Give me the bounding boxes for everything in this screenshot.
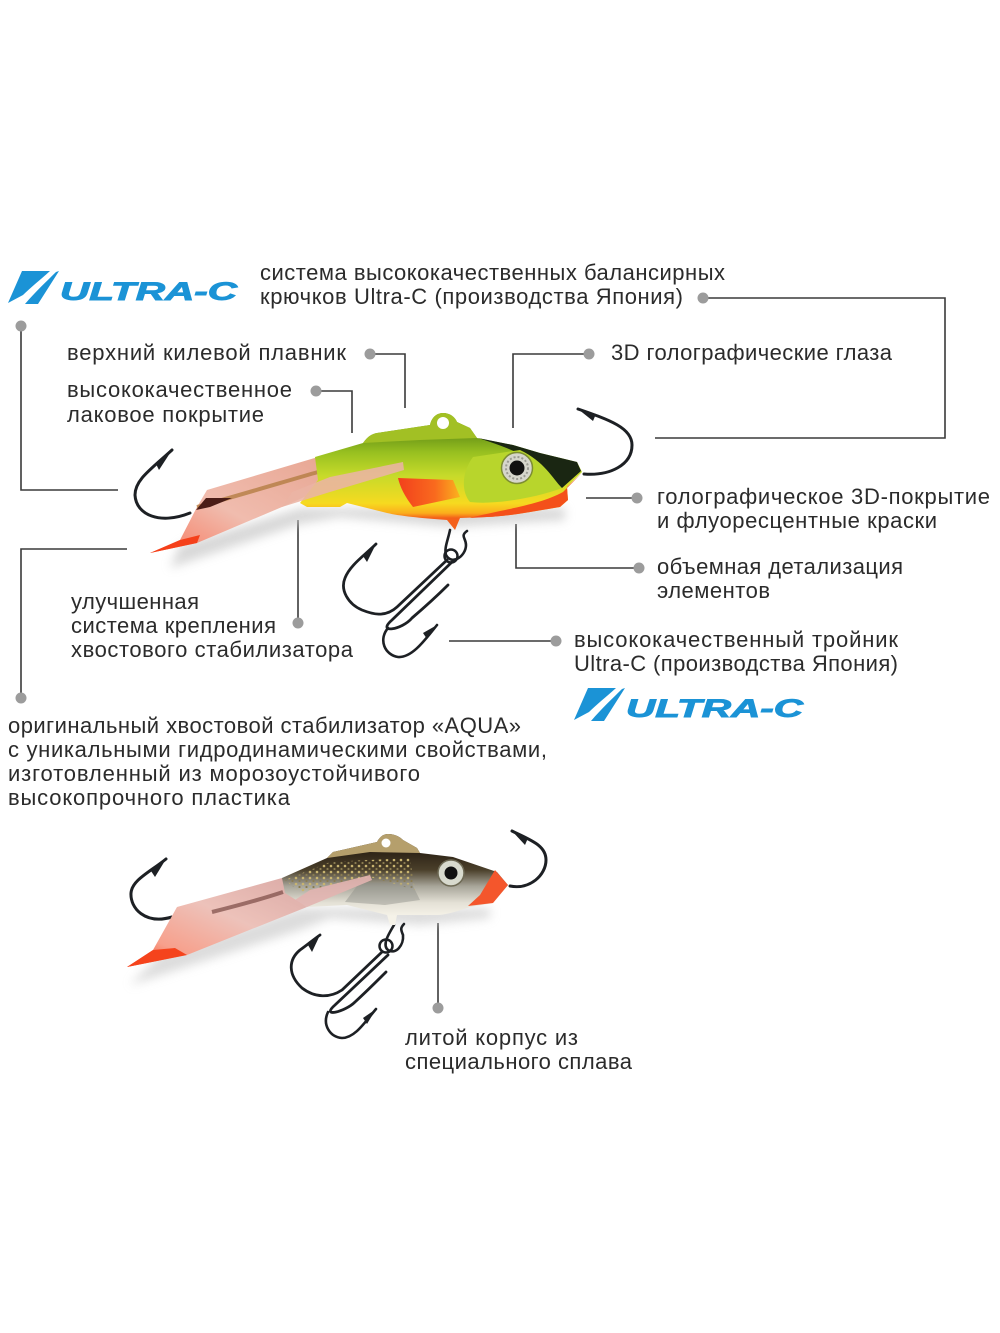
text: cast body: специального сплава [405, 1049, 633, 1074]
dark head top [478, 438, 581, 488]
scale band [285, 858, 415, 892]
text: hooks description: крючков Ultra-C (производства Япония) [260, 284, 683, 309]
gill cover [464, 450, 562, 503]
text: holographic coating: голографическое 3D-покрытие [657, 484, 990, 509]
text: AQUA stabilizer: изготовленный из морозоустойчивого [8, 761, 420, 786]
body [300, 413, 582, 530]
text: AQUA stabilizer: оригинальный хвостовой стабилизатор «AQUA» [8, 713, 521, 738]
callout leader lines [16, 292, 945, 1014]
logo: Ultra-C bottom [574, 688, 805, 723]
shadow [170, 508, 565, 568]
text: stabilizer mount: улучшенная [71, 589, 199, 614]
text: detail: элементов [657, 578, 770, 603]
text: upper keel fin: верхний килевой плавник [67, 340, 346, 365]
eye [438, 860, 464, 886]
text: treble hook: высококачественный тройник [574, 627, 898, 652]
red chin [468, 870, 508, 906]
body [282, 834, 508, 925]
logo: Ultra-C top: ULTRA-C [60, 278, 239, 306]
dorsal fin [327, 834, 420, 858]
shadow [130, 908, 490, 985]
text: 3D eyes: 3D голографические глаза [611, 340, 893, 365]
text: lacquer coating: лаковое покрытие [67, 402, 264, 427]
tail stabilizer [127, 878, 320, 967]
tail stabilizer [150, 457, 320, 553]
text: treble hook: Ultra-C (производства Япония) [574, 651, 898, 676]
lure: silver fish [127, 831, 546, 1038]
eye [502, 452, 532, 484]
text: lacquer coating: высококачественное [67, 377, 292, 402]
text: hooks description: система высококачественных балансирных [260, 260, 725, 285]
logo: Ultra-C top [8, 271, 239, 306]
lure: green fish [135, 409, 632, 657]
dorsal fin highlight [363, 413, 477, 443]
hooks [131, 831, 546, 1038]
text: stabilizer mount: система крепления [71, 613, 276, 638]
chin orange [470, 473, 582, 518]
text: stabilizer mount: хвостового стабилизатора [71, 637, 354, 662]
text: detail: объемная детализация [657, 554, 903, 579]
stabilizer strip [295, 875, 372, 907]
text: AQUA stabilizer: высокопрочного пластика [8, 785, 291, 810]
silver flank scales [345, 882, 420, 905]
stabilizer strip [282, 462, 404, 507]
text: cast body: литой корпус из [405, 1025, 578, 1050]
hooks [135, 409, 632, 657]
text: holographic coating: и флуоресцентные краски [657, 508, 937, 533]
pectoral fin [398, 478, 460, 507]
logo: Ultra-C bottom: ULTRA-C [626, 695, 805, 723]
text: AQUA stabilizer: с уникальными гидродинамическими свойствами, [8, 737, 547, 762]
